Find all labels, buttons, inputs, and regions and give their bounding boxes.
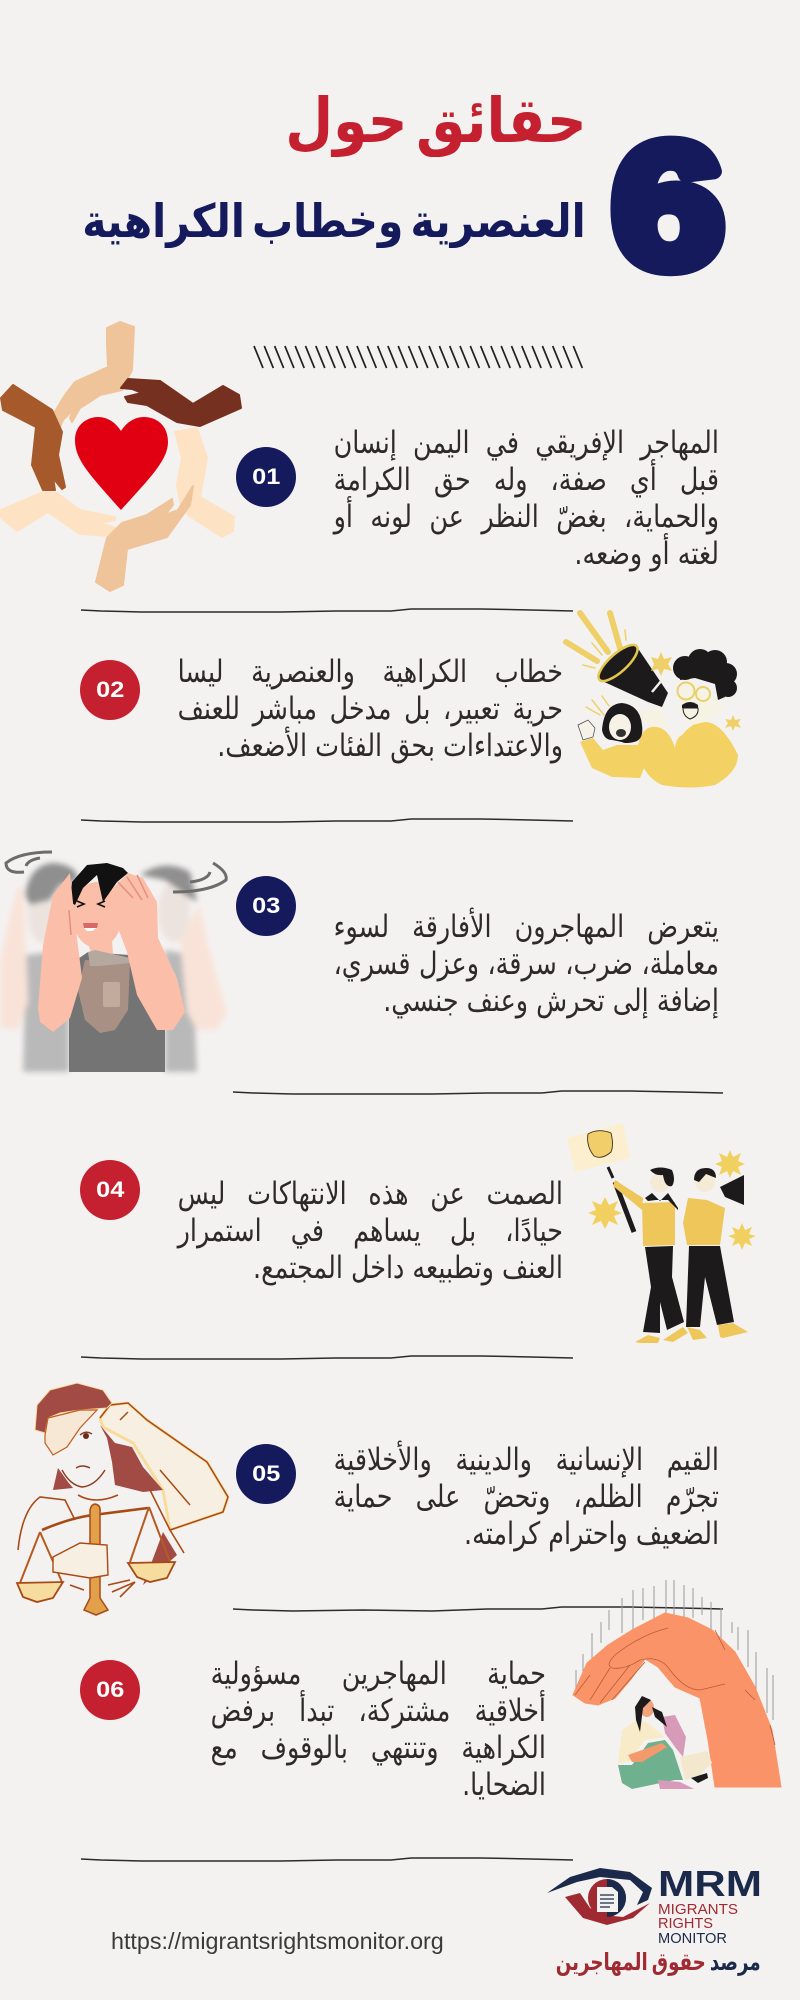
text block 06: أخلاقية مشتركة، تبدأ برفض [211, 1693, 546, 1729]
pink woman [662, 1715, 686, 1757]
rays [566, 613, 626, 715]
website url: https://migrantsrightsmonitor.org [111, 1928, 444, 1954]
black shoe [691, 1773, 708, 1783]
hatched stroke row [253, 346, 583, 368]
swirls [6, 852, 226, 892]
hand [573, 1613, 781, 1787]
icon: distressed person holding head [0, 850, 228, 1075]
divider [233, 1606, 723, 1612]
stars [588, 1150, 756, 1250]
divider [81, 818, 573, 823]
man's arm holding megaphone [640, 708, 668, 728]
man face [677, 680, 728, 725]
text block 02: خطاب الكراهية والعنصرية ليسا [178, 654, 563, 690]
icon: ring of hands around a heart [0, 321, 242, 592]
badge 03 [236, 876, 296, 936]
fist [588, 1131, 612, 1157]
arm [628, 1743, 667, 1762]
head and hair [640, 1699, 654, 1717]
title: second line: العنصرية وخطاب الكراهية [83, 194, 586, 248]
text block 04: حيادًا، بل يساهم في استمرار [178, 1213, 563, 1249]
pink shoe [658, 1780, 694, 1789]
glasses [678, 682, 710, 701]
text block 02: والاعتداءات بحق الفئات الأضعف. [217, 728, 563, 764]
icon: heart [75, 417, 168, 510]
divider [81, 1857, 573, 1862]
logo: MRM migrants rights monitor: RIGHTS [658, 1915, 713, 1932]
text block 01 [332, 425, 719, 572]
beige leg [680, 1751, 712, 1780]
text block 04: الصمت عن هذه الانتهاكات ليس [178, 1176, 563, 1212]
logo arabic name: مرصد حقوق المهاجرين [556, 1948, 761, 1976]
badge 06 [80, 1660, 140, 1720]
arm [100, 1403, 228, 1530]
badge 02: 02 [96, 677, 124, 702]
badge 04 [80, 1160, 140, 1220]
arms [38, 873, 82, 1032]
stick [615, 1182, 634, 1232]
divider [233, 1090, 723, 1095]
text block 06: الضحايا. [462, 1767, 546, 1803]
divider [81, 1355, 573, 1360]
text block 05: تجرّم الظلم، وتحضّ على حماية [334, 1479, 719, 1515]
badge 03: 03 [252, 893, 280, 918]
badge 04: 04 [96, 1177, 124, 1202]
rain [576, 1580, 773, 1720]
collar [88, 950, 130, 966]
badge 06: 06 [96, 1677, 124, 1702]
person A [613, 1180, 643, 1210]
shirt [69, 952, 165, 1072]
badge 01 [236, 447, 296, 507]
text block 06: الكراهية وتنتهي بالوقوف مع [211, 1730, 546, 1766]
face [72, 882, 122, 948]
text block 03 [334, 908, 719, 1019]
text block 04 [176, 1176, 563, 1286]
fist [53, 1543, 108, 1578]
badge 05 [236, 1444, 296, 1504]
pans [17, 1582, 63, 1602]
badge 01: 01 [252, 464, 280, 489]
cream shirt [618, 1720, 665, 1763]
post [84, 1504, 108, 1615]
person B [683, 1198, 725, 1245]
neck [86, 938, 113, 955]
text block 02: حرية تعبير، بل مدخل مباشر للعنف [178, 691, 563, 727]
man hair [673, 649, 737, 700]
icon: man with megaphone and shouting woman [563, 610, 741, 788]
sign [567, 1123, 630, 1172]
right hair [100, 1425, 163, 1492]
megaphone [600, 647, 668, 707]
stars [651, 652, 741, 731]
logo: MRM migrants rights monitor: MONITOR [658, 1930, 727, 1947]
title: first line: حقائق حول [286, 84, 587, 157]
text block 05: القيم الإنسانية والدينية والأخلاقية [334, 1442, 719, 1478]
torso lines [18, 1490, 184, 1553]
divider [81, 608, 573, 613]
beam [42, 1508, 148, 1530]
big number six: 6 [612, 107, 724, 304]
top hair [35, 1383, 112, 1433]
woman body [580, 738, 644, 778]
logo: MRM migrants rights monitor: MRM [658, 1863, 762, 1904]
green pants [618, 1740, 683, 1789]
logo: MRM migrants rights monitor: MIGRANTS [658, 1901, 738, 1918]
chains [20, 1507, 170, 1583]
text block 06 [211, 1656, 546, 1803]
icon: large hand sheltering two women from rain [572, 1580, 782, 1789]
woman's hand [578, 720, 595, 740]
text block 01: المهاجر الإفريقي في اليمن إنسان [334, 425, 719, 461]
text block 03: معاملة، ضرب، سرقة، وعزل قسري، [334, 946, 719, 982]
blindfold [45, 1410, 97, 1455]
text block 06: حماية المهاجرين مسؤولية [211, 1656, 546, 1692]
text block 03: إضافة إلى تحرش وعنف جنسي. [383, 983, 719, 1019]
woman face [609, 714, 631, 740]
icon: blindfolded lady justice with scales [16, 1382, 230, 1616]
text block 05 [334, 1440, 719, 1552]
text block 01: والحماية، بغضّ النظر عن لونه أو [334, 499, 719, 535]
man body [638, 722, 738, 788]
eye [547, 1868, 652, 1925]
hair [70, 863, 128, 905]
drapery [70, 1580, 135, 1597]
text block 01: قبل أي صفة، وله حق الكرامة [334, 462, 719, 498]
logo: MRM migrants rights monitor [547, 1863, 762, 1976]
badge 05: 05 [252, 1461, 280, 1486]
text block 04: العنف وتطبيعه داخل المجتمع. [253, 1250, 563, 1286]
woman hair [602, 703, 642, 743]
face lines [62, 1432, 105, 1487]
text block 03: يتعرض المهاجرون الأفارقة لسوء [334, 909, 719, 945]
icon: two protesters with sign and megaphone [567, 1123, 756, 1343]
text block 02 [178, 654, 563, 764]
megaphone [720, 1175, 744, 1205]
mustache and mouth [682, 702, 698, 708]
left lower hair [53, 1468, 73, 1490]
ghost images [0, 863, 227, 1072]
text block 05: الضعيف واحترام كرامته. [464, 1516, 719, 1552]
badge 02 [80, 660, 140, 720]
text block 01: لغته أو وضعه. [574, 536, 719, 572]
